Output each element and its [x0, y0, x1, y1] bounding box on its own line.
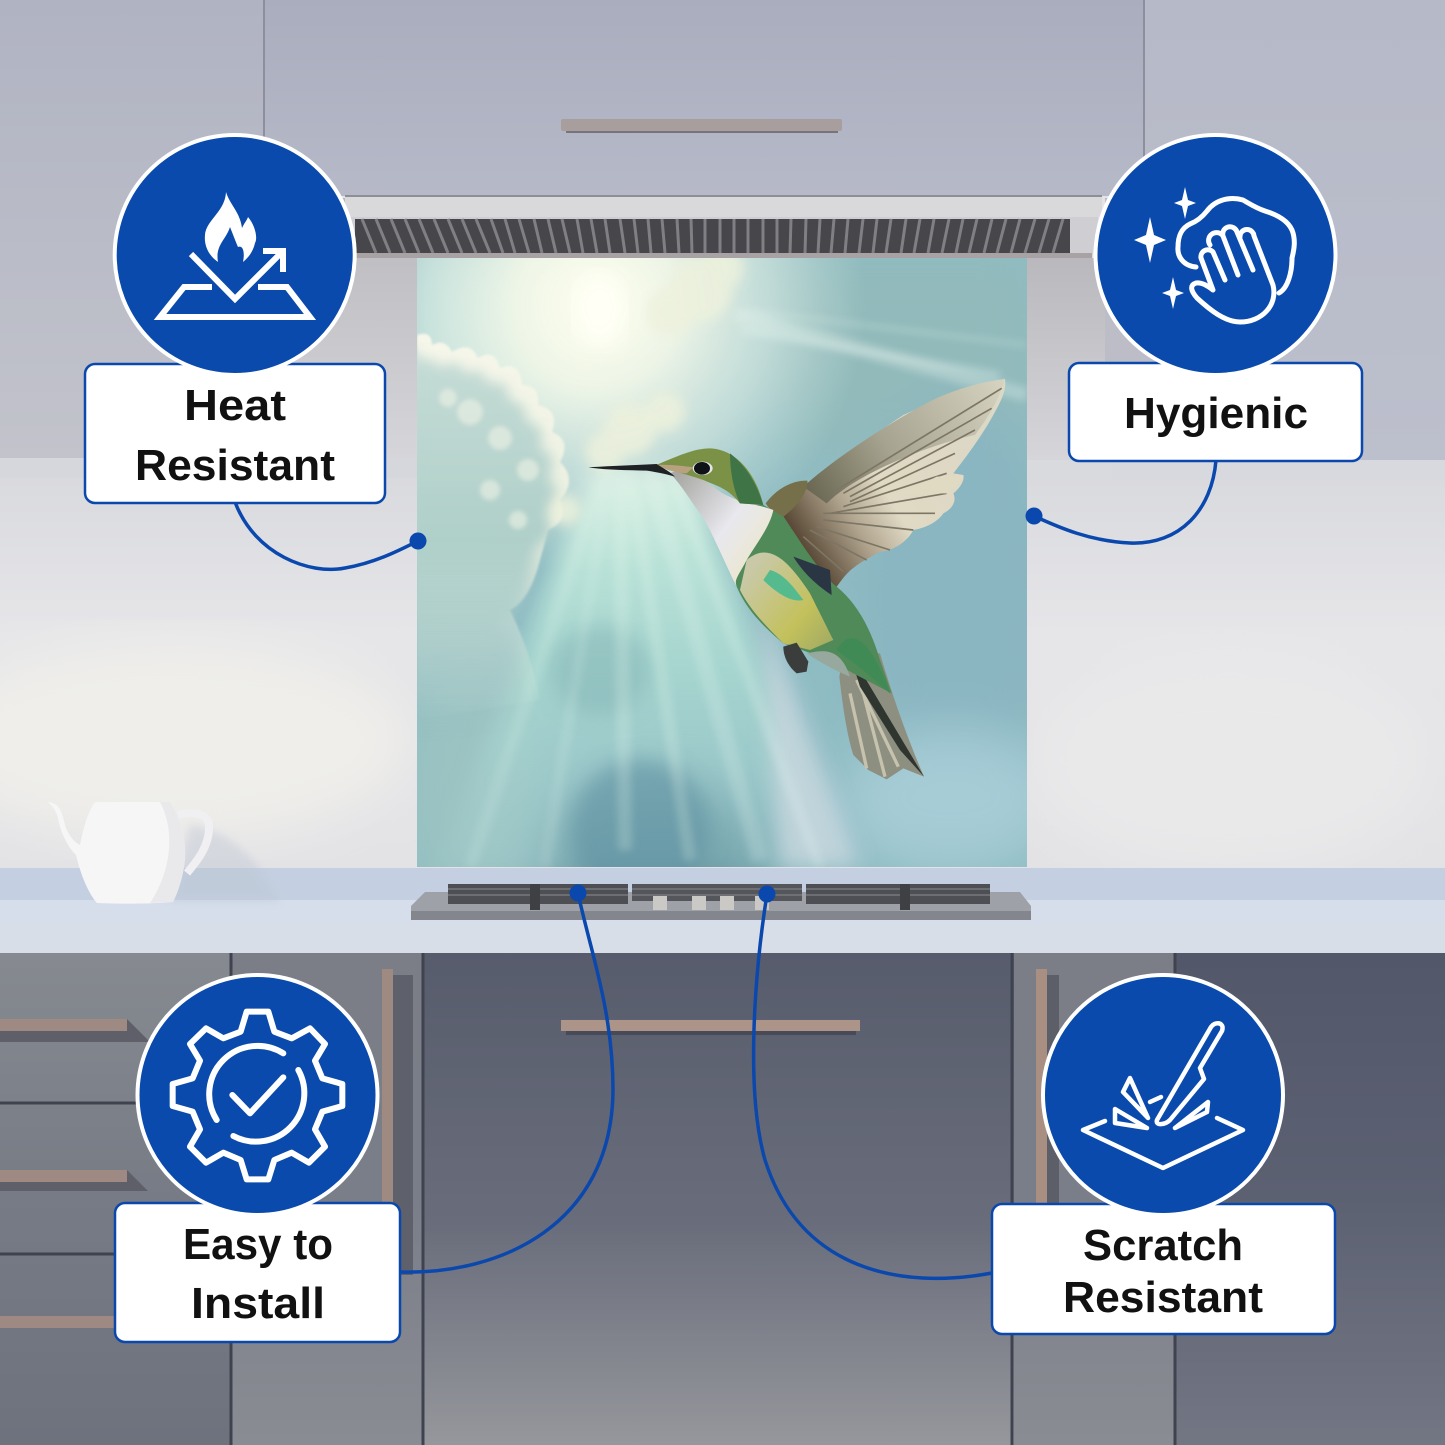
label: heat resistant: Heat [184, 381, 286, 430]
foot [783, 643, 808, 673]
splashback panel: hummingbird [417, 258, 1027, 867]
icon: gear with check [173, 1012, 342, 1179]
badge: heat resistant [115, 135, 355, 375]
badge: hygienic [1096, 135, 1336, 375]
label: scratch resistant: Resistant [1063, 1273, 1263, 1322]
throat [670, 471, 773, 587]
connector: easy to install [400, 884, 613, 1272]
cooktop [411, 884, 1031, 920]
connector: heat resistant [235, 502, 426, 569]
clouds [417, 258, 747, 704]
label: easy to install: Easy to [183, 1220, 333, 1269]
icon: flame over surface with arrow [160, 192, 310, 317]
badge: easy to install [138, 975, 378, 1215]
label: easy to install [115, 1203, 400, 1342]
upper wing [783, 379, 1005, 593]
label: easy to install: Install [191, 1279, 325, 1328]
light rays [470, 310, 1027, 867]
badge: scratch resistant [1043, 975, 1283, 1215]
label: scratch resistant: Scratch [1083, 1221, 1243, 1270]
label: heat resistant: Resistant [135, 441, 335, 490]
beak [588, 464, 675, 477]
head [656, 448, 763, 505]
connector: scratch resistant [754, 886, 992, 1278]
label: hygienic [1069, 363, 1362, 461]
eye [693, 462, 713, 475]
icon: knife scratching surface [1083, 1023, 1243, 1168]
shoulder [766, 481, 807, 517]
label: scratch resistant [992, 1204, 1335, 1334]
teapot [48, 802, 280, 904]
connector: hygienic [1026, 460, 1216, 543]
body [731, 505, 892, 693]
label: heat resistant [85, 364, 385, 503]
hummingbird [588, 379, 1005, 779]
label: hygienic: Hygienic [1124, 389, 1308, 438]
icon: hand wiping with sparkles [1134, 187, 1294, 322]
tail [839, 653, 924, 779]
